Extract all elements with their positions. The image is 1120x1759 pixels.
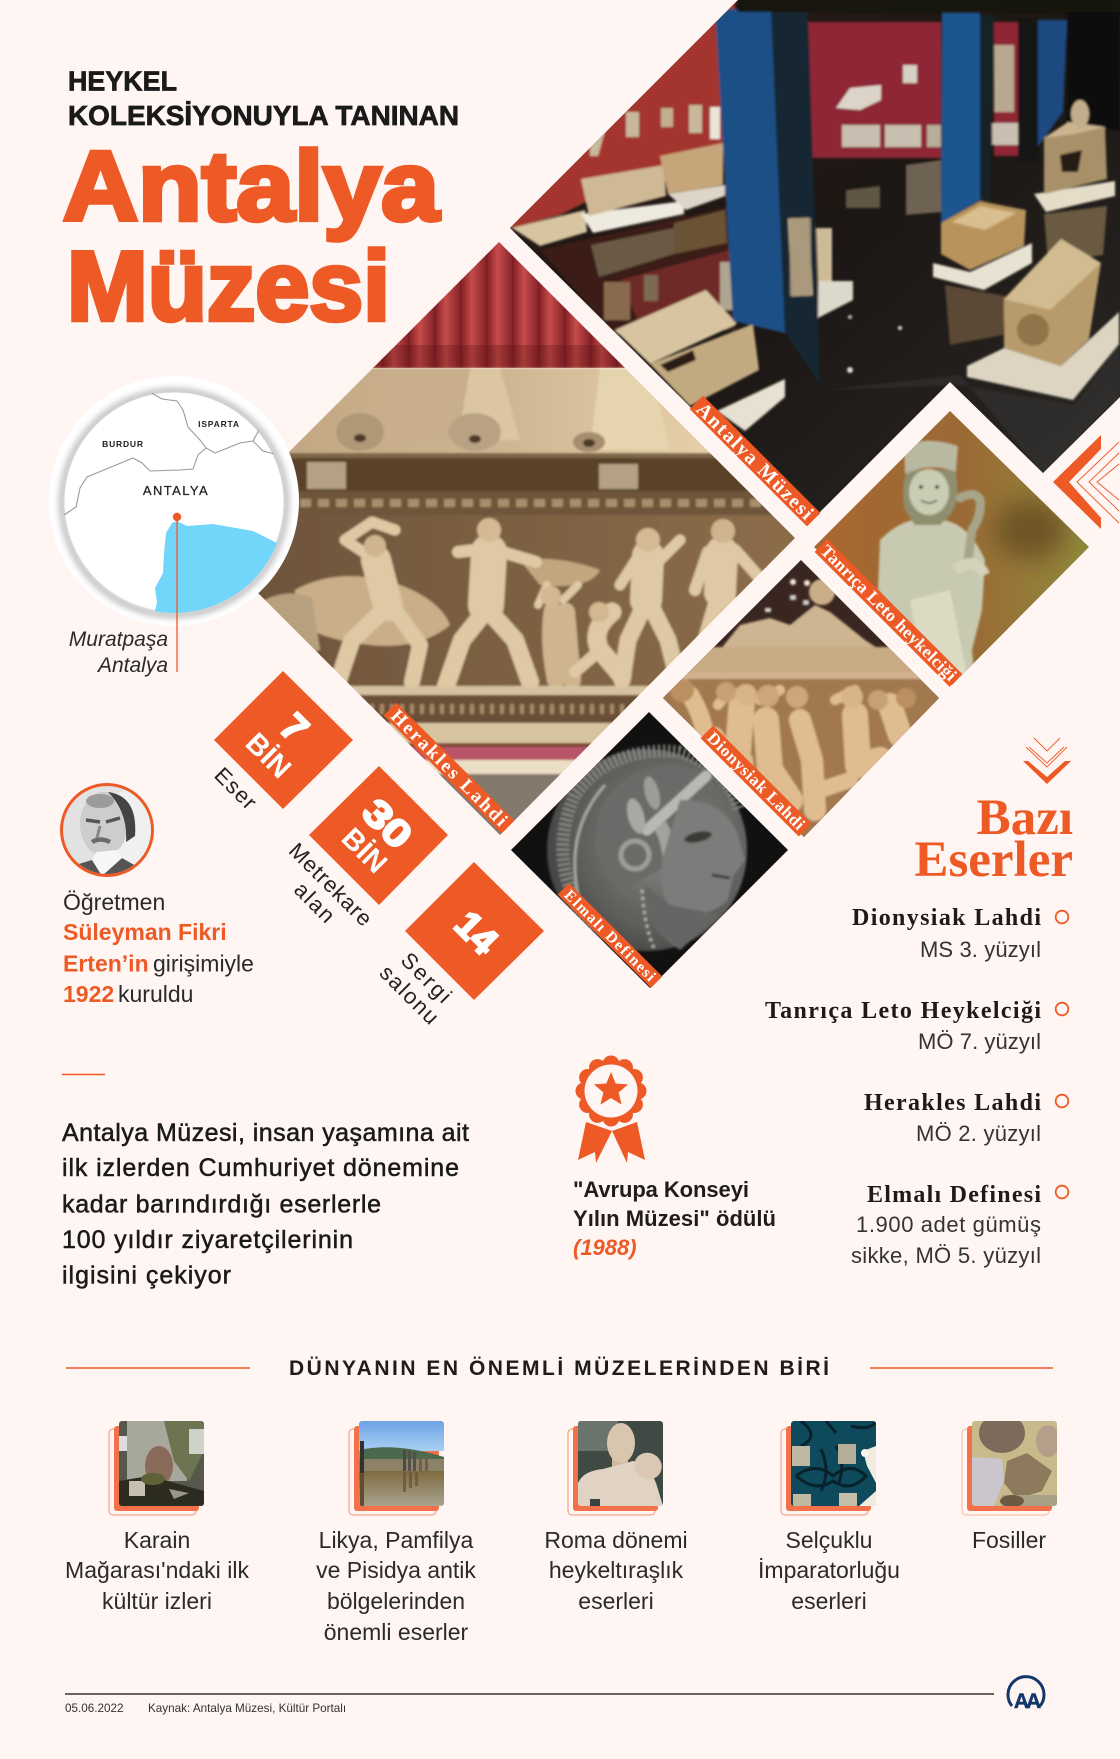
plinths and sarcophagi: [581, 201, 684, 233]
map labels: [102, 419, 240, 498]
intro paragraph: ilk izlerden Cumhuriyet dönemine: [62, 1154, 459, 1182]
caption: Likya: ve Pisidya antik: [316, 1557, 476, 1583]
award text: (1988): [573, 1235, 637, 1260]
sea: [155, 521, 277, 613]
stat: 7 bin eser: 7: [271, 706, 316, 751]
stat: 14 sergi salonu: Sergi: [396, 947, 457, 1008]
item: Herakles Lahdi: Herakles Lahdi: [864, 1090, 1041, 1116]
map labels: BURDUR: [102, 439, 144, 449]
stat: 30 bin metrekare: 30: [353, 791, 420, 858]
intro paragraph: ilgisini çekiyor: [62, 1262, 231, 1290]
heading: Bazı Eserler: Bazı: [977, 790, 1073, 846]
province borders: [64, 392, 275, 515]
location text: Antalya: [96, 654, 168, 677]
caption: Roma: eserleri: [578, 1588, 654, 1614]
list: artworks: [765, 905, 1068, 1268]
heading: Bazı Eserler: Eserler: [914, 832, 1073, 888]
panel: Leto statuette photo: [810, 408, 1092, 688]
caption: Selçuklu: Selçuklu: [786, 1527, 872, 1553]
label: Dionysiak Lahdi: Dionysiak Lahdi: [703, 728, 809, 834]
caption: Likya: bölgelerinden: [327, 1588, 465, 1614]
founder portrait: [60, 782, 154, 877]
logo: AA: AA: [1014, 1690, 1041, 1713]
caption: Roma: heykeltıraşlık: [549, 1557, 684, 1583]
stat: 14 sergi salonu: [375, 862, 544, 1029]
item: Dionysiak Lahdi: [852, 905, 1068, 962]
label: Elmalı Definesi: Elmalı Definesi: [561, 887, 659, 985]
main title: Antalya: [63, 131, 441, 241]
stat: 30 bin metrekare: Metrekare: [284, 838, 377, 931]
centre sarcophagus: [816, 228, 832, 286]
caption: Karain: Karain: [124, 1527, 190, 1553]
item: Herakles Lahdi: MÖ 2. yüzyıl: [916, 1121, 1041, 1146]
item: Dionysiak Lahdi: MS 3. yüzyıl: [920, 937, 1041, 962]
caption: Karain: Mağarası'ndaki ilk: [65, 1557, 250, 1583]
logo: AA: [1008, 1677, 1044, 1713]
section heading: DÜNYANIN EN ÖNEMLİ MÜZELERİNDEN BİRİ: [289, 1357, 829, 1380]
captions: [65, 1527, 1046, 1645]
map labels: ISPARTA: [198, 419, 240, 429]
face: [661, 800, 745, 914]
icon: down chevrons: [1023, 738, 1071, 784]
right sarcophagi: [1034, 181, 1115, 212]
item: Tanrıça Leto Heykelciği: [765, 998, 1068, 1054]
intro paragraph: [62, 1119, 469, 1290]
panel: museum hall photo: [500, 0, 1120, 530]
item: Herakles Lahdi: [864, 1090, 1068, 1146]
item: Tanrıça Leto Heykelciği: MÖ 7. yüzyıl: [918, 1029, 1041, 1054]
item: Elmalı Definesi: [851, 1182, 1068, 1268]
thumbnail: ancient ruins: [349, 1421, 444, 1515]
stat: 30 bin metrekare: BİN: [335, 822, 393, 880]
icon: award rosette: [576, 1056, 646, 1163]
floor reflection: [540, 205, 735, 335]
helmet: [620, 792, 676, 878]
relief figures: [295, 576, 450, 646]
caption: Selçuklu: İmparatorluğu: [758, 1557, 900, 1583]
founder text: girişimiyle: [153, 950, 254, 976]
caption: Roma: Roma dönemi: [544, 1527, 688, 1553]
map inset: [49, 376, 300, 672]
kicker heading: [68, 66, 459, 131]
item: Tanrıça Leto Heykelciği: Tanrıça Leto Heykelciği: [765, 998, 1041, 1024]
thumbnail: fossils: [962, 1413, 1060, 1515]
stat: 7 bin eser: Eser: [209, 762, 262, 815]
item: Elmalı Definesi: sikke, MÖ 5. yüzyıl: [851, 1243, 1041, 1268]
panel: Herakles sarcophagus photo: [258, 242, 795, 835]
panel: Dionysiak sarcophagus photo: [660, 556, 942, 841]
footer: [65, 1677, 1044, 1715]
location text: Muratpaşa: [69, 628, 168, 651]
title block: [63, 66, 459, 341]
panel: Elmalı coin photo: [508, 708, 792, 992]
intro paragraph: Antalya Müzesi, insan yaşamına ait: [62, 1119, 469, 1147]
stat: 7 bin eser: [209, 671, 353, 815]
award text: [573, 1177, 776, 1260]
stat: 30 bin metrekare: [284, 766, 448, 931]
thumbnail: Seljuk tiles: [781, 1421, 876, 1515]
label: Herakles Lahdi: Herakles Lahdi: [386, 706, 511, 831]
item: Elmalı Definesi: 1.900 adet gümüş: [856, 1212, 1041, 1237]
caption: Fosiller: Fosiller: [972, 1527, 1046, 1553]
caption: Selçuklu: [758, 1527, 900, 1614]
heading: Bazı Eserler: [914, 790, 1073, 888]
back red wall: [808, 22, 941, 158]
caption: Selçuklu: eserleri: [791, 1588, 867, 1614]
statue body: [878, 519, 985, 680]
caption: Likya: önemli eserler: [324, 1619, 469, 1645]
stat: 14 sergi salonu: 14: [446, 904, 505, 963]
stat: 7 bin eser: BİN: [239, 727, 297, 785]
founder text: Öğretmen: [63, 889, 165, 915]
low slab: [512, 210, 587, 246]
thumbnail: Karain cave: [109, 1421, 204, 1515]
founder text: Erten’in: [63, 950, 149, 976]
map labels: ANTALYA: [143, 483, 209, 498]
item: Elmalı Definesi: Elmalı Definesi: [867, 1182, 1041, 1208]
founder text: Süleyman Fikri: [63, 919, 227, 945]
location pin: [173, 513, 181, 672]
main title: [63, 131, 441, 341]
item: Dionysiak Lahdi: Dionysiak Lahdi: [852, 905, 1041, 931]
footer: Kaynak: Antalya Müzesi, Kültür Portalı: [148, 1702, 346, 1715]
blue columns: [715, 9, 785, 333]
founder text: kuruldu: [118, 981, 193, 1007]
award text: "Avrupa Konseyi: [573, 1177, 749, 1202]
award text: Yılın Müzesi" ödülü: [573, 1206, 776, 1231]
intro paragraph: kadar barındırdığı eserlerle: [62, 1190, 381, 1218]
wall fragments: [590, 128, 606, 156]
label: Antalya Müzesi: Antalya Müzesi: [692, 398, 818, 525]
caption: Likya: Likya, Pamfilya: [319, 1527, 474, 1553]
stat: 14 sergi salonu: salonu: [375, 960, 444, 1029]
thumbnail: Roman statue: [568, 1421, 667, 1515]
footer: 05.06.2022: [65, 1702, 124, 1715]
intro paragraph: 100 yıldır ziyaretçilerinin: [62, 1226, 353, 1254]
kicker heading: KOLEKSİYONUYLA TANINAN: [68, 100, 459, 131]
founder text: [63, 889, 254, 1007]
floor lights: [847, 367, 853, 373]
stat: 30 bin metrekare: alan: [289, 877, 340, 928]
caption: Karain: kültür izleri: [102, 1588, 212, 1614]
kicker heading: HEYKEL: [68, 66, 177, 96]
icon: left-pointing chevrons: [1053, 435, 1119, 529]
caption: Likya: [316, 1527, 476, 1645]
main title: Müzesi: [67, 231, 390, 341]
location text: [69, 628, 168, 677]
caption: Roma: [544, 1527, 688, 1614]
founder text: 1922: [63, 981, 114, 1007]
left red wall: [500, 0, 735, 232]
caption: Karain: [65, 1527, 250, 1614]
label: Tanrıça Leto heykelciği: Tanrıça Leto heykelciği: [817, 541, 961, 685]
